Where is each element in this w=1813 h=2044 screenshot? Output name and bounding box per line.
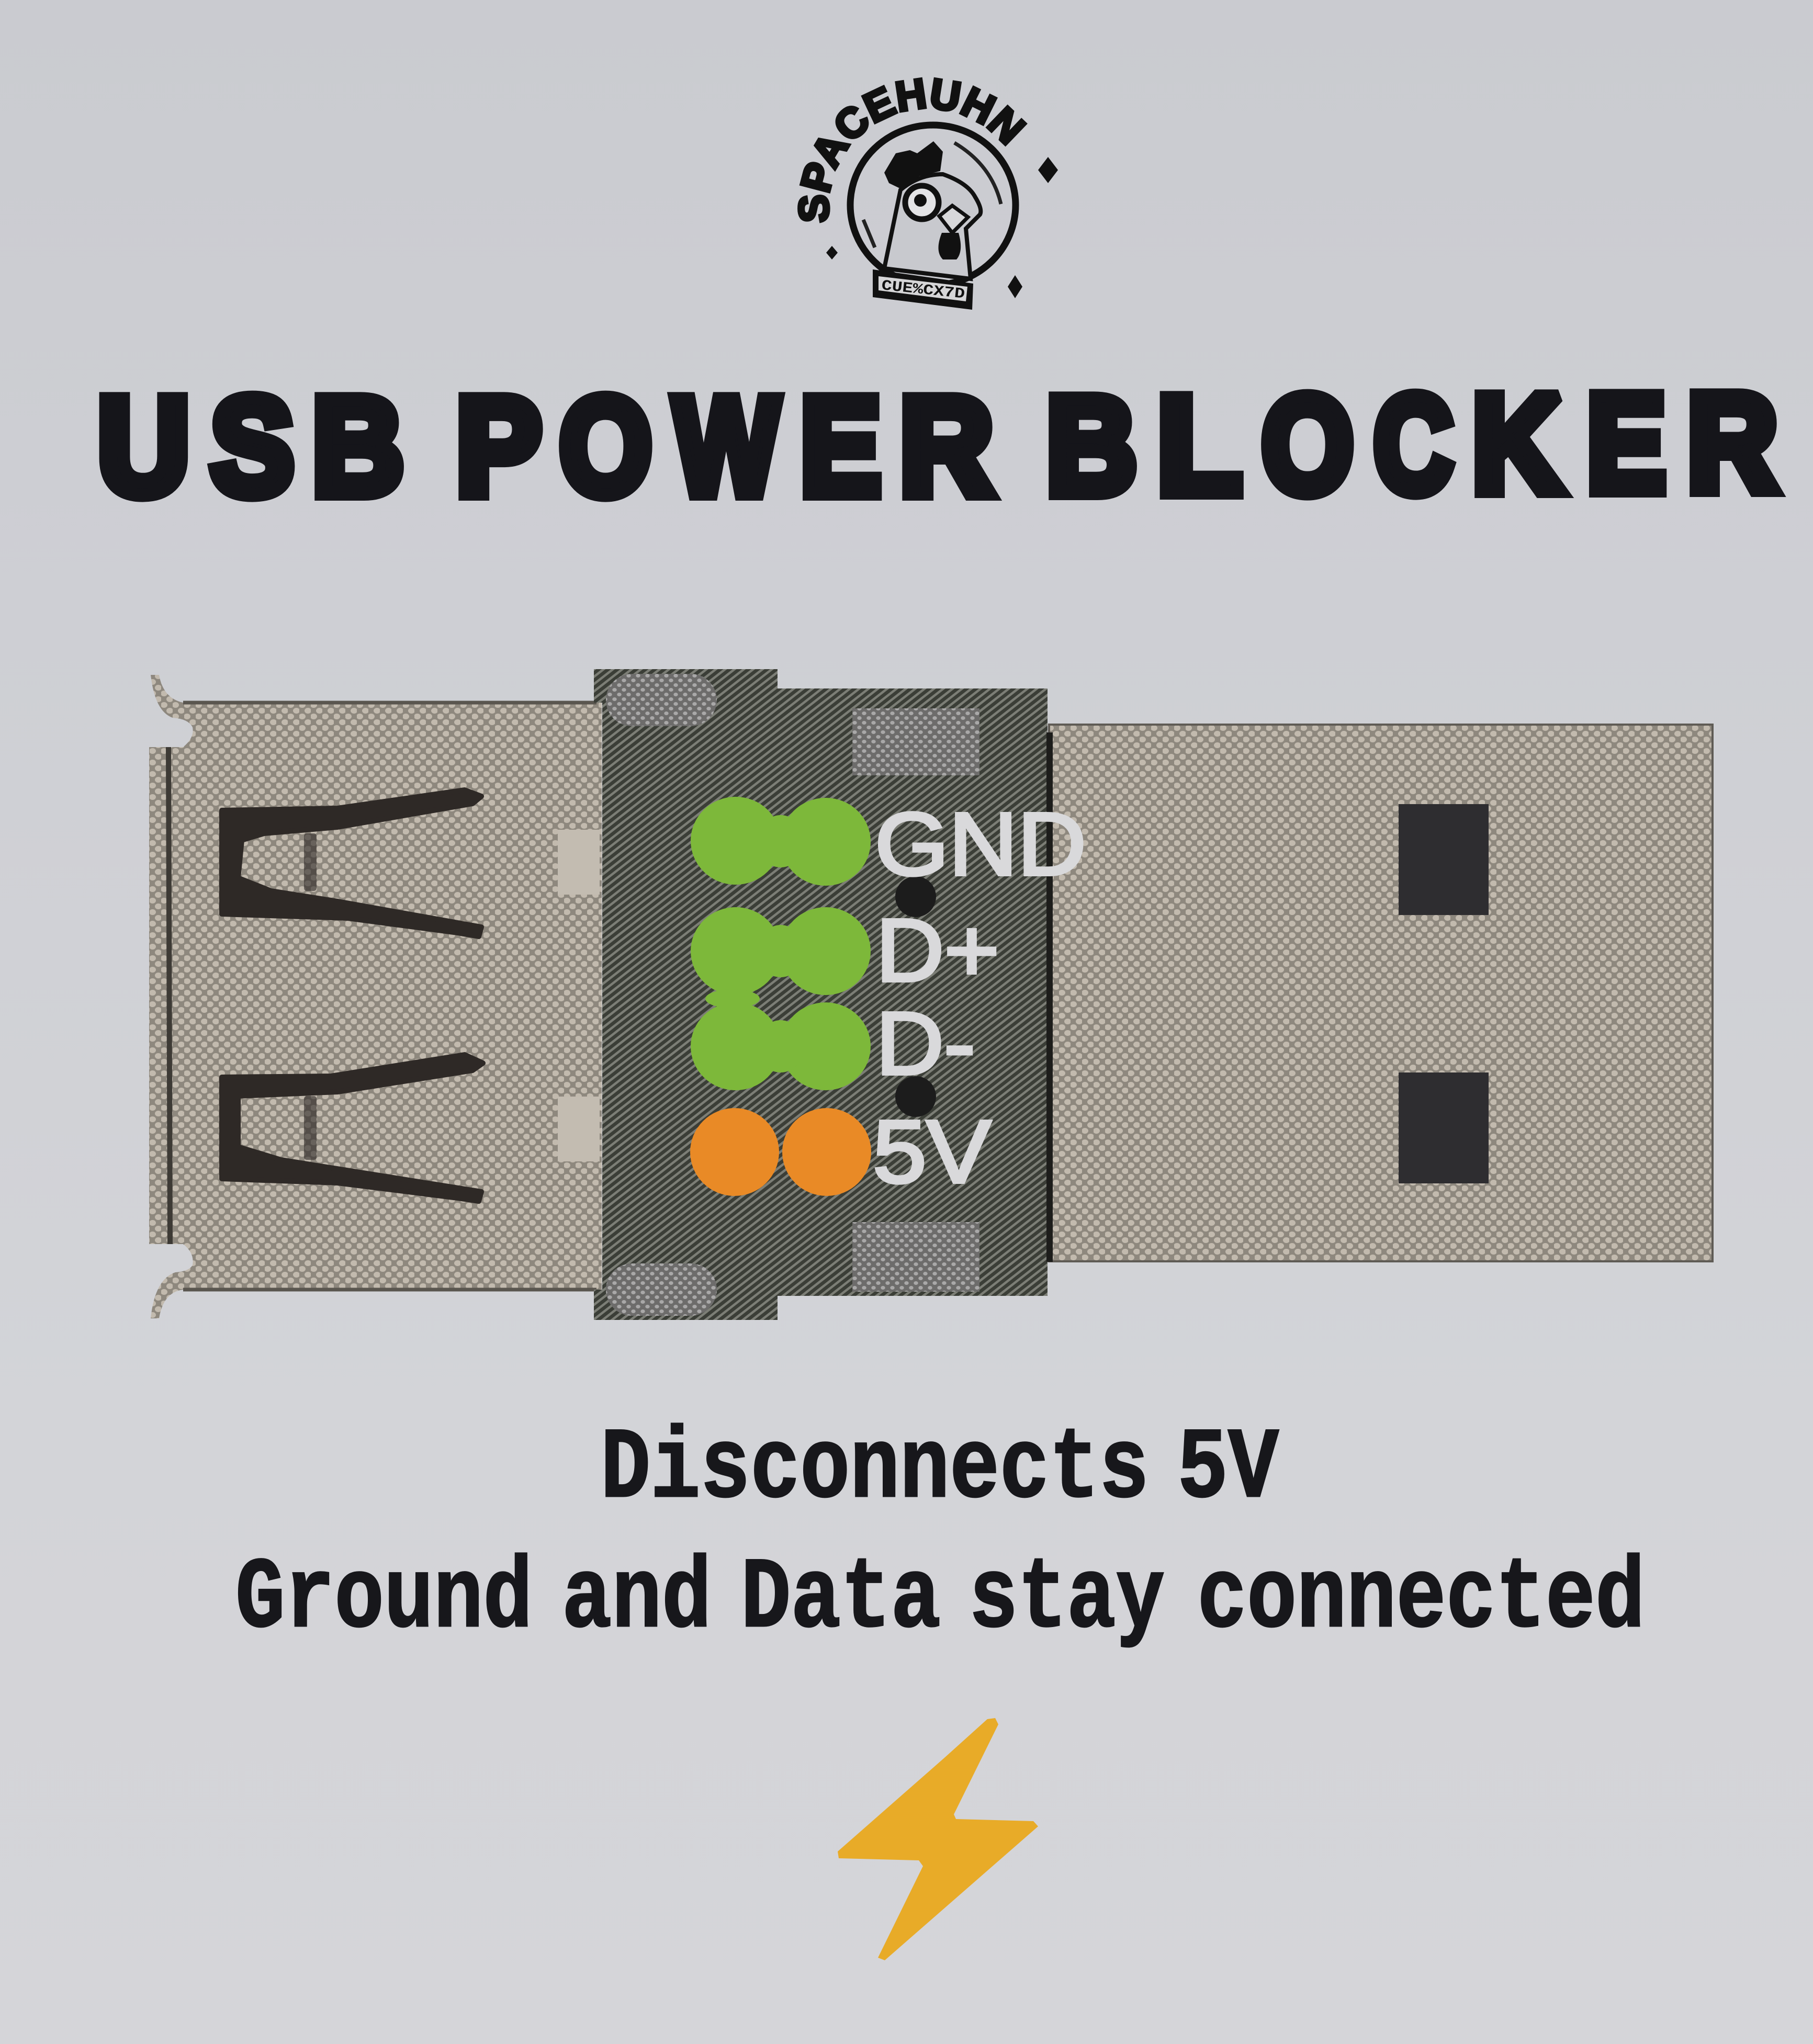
title: W (674, 369, 780, 523)
title: L (1157, 368, 1241, 522)
male USB plug (1049, 725, 1713, 1261)
title: P (456, 369, 541, 523)
circuit board (594, 669, 1086, 1320)
lower light tab (558, 1097, 600, 1161)
connector outline (183, 703, 596, 1290)
description line 2: connected (1197, 1542, 1645, 1656)
description line 2: stay (969, 1542, 1165, 1656)
chicken head (884, 174, 981, 279)
title: B (1046, 368, 1136, 523)
logo stars (826, 157, 1058, 298)
description line 1: Disconnects (601, 1413, 1149, 1527)
GND label: GND (875, 795, 1086, 894)
chicken wattle (938, 233, 961, 259)
via dots (895, 876, 936, 1117)
plug upper hole (1399, 804, 1489, 915)
chicken comb (884, 141, 943, 190)
plug body (1049, 725, 1713, 1261)
description line 2: and (562, 1542, 712, 1656)
title: B (312, 369, 403, 523)
D- pads (691, 989, 871, 1090)
title: O (1262, 367, 1353, 522)
description line 2: Ground (235, 1542, 533, 1656)
chicken pupil (914, 194, 927, 207)
title: R (1687, 365, 1777, 520)
logo inner arc strokes (863, 143, 1001, 247)
top SMD component (852, 708, 979, 775)
logo plate inner (879, 276, 967, 301)
title: R (900, 369, 993, 523)
description line 2 (235, 1542, 1645, 1656)
title: K (1472, 366, 1562, 521)
icon: lightning bolt (838, 1718, 1038, 1960)
description line 2: Data (741, 1542, 941, 1656)
logo wordmark: SPACEHUHN (797, 77, 1028, 223)
D- label: D- (876, 994, 975, 1093)
title: O (560, 369, 651, 523)
chicken beak (939, 206, 968, 233)
logo plate text: CUE%CX7D (881, 278, 965, 303)
title: U (98, 369, 189, 523)
description line 1: 5V (1177, 1413, 1279, 1527)
USB adapter diagram (149, 669, 1713, 1320)
5V pads (690, 1108, 871, 1196)
bottom left mounting pad (606, 1263, 717, 1316)
connector front lip line (168, 747, 170, 1244)
GND pads (691, 797, 871, 886)
board outline (594, 669, 1048, 1320)
chicken eye (905, 186, 939, 219)
logo plate (873, 269, 973, 310)
5V label: 5V (873, 1102, 991, 1202)
D+ pads (691, 907, 871, 995)
connector body (149, 675, 602, 1318)
title: S (211, 369, 294, 523)
upper light tab (558, 830, 600, 895)
top left mounting pad (606, 674, 717, 726)
board right shadow edge (1046, 732, 1053, 1262)
lower contact spring (222, 1055, 483, 1201)
bottom SMD component (852, 1222, 979, 1292)
plug lower hole (1399, 1072, 1489, 1183)
title: C (1374, 367, 1452, 521)
title (98, 365, 1777, 523)
logo: Spacehuhn (797, 77, 1058, 310)
title: E (801, 369, 881, 523)
female USB connector (149, 675, 602, 1318)
upper contact spring (222, 790, 481, 936)
logo ring (850, 125, 1016, 285)
D+ label: D+ (876, 901, 999, 1000)
title: E (1587, 366, 1665, 520)
